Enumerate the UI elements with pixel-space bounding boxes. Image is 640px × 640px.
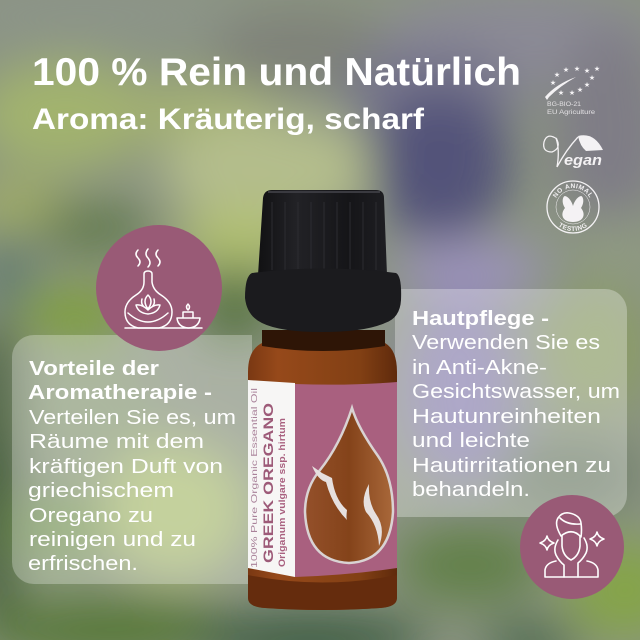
badge: EU organic leaf: ★	[594, 65, 600, 73]
badge: EU organic leaf: ★	[569, 89, 575, 97]
icon: aroma diffuser circle	[96, 225, 222, 351]
label text: Origanum vulgare ssp. hirtum	[277, 418, 288, 567]
text block: aromatherapy: Aromatherapie -	[28, 381, 212, 404]
badge: no animal testing: TESTING	[560, 222, 587, 231]
text block: aromatherapy: griechischem	[28, 479, 174, 502]
badge: EU organic leaf: ★	[577, 86, 583, 94]
text block: aromatherapy: kräftigen Duft von	[29, 455, 223, 478]
drop emblem	[305, 408, 393, 563]
text block: skin care: Verwenden Sie es	[412, 331, 600, 354]
text block: skin care: behandeln.	[412, 478, 530, 501]
badge: EU organic leaf: ★	[550, 79, 556, 87]
panel: skin care	[395, 289, 627, 517]
title: Aroma: Kräuterig, scharf	[32, 103, 424, 136]
badge: EU organic leaf: BG-BIO-21	[547, 101, 581, 108]
badge: EU organic leaf: ★	[574, 65, 580, 73]
badge: EU organic leaf: ★	[584, 81, 590, 89]
text block: skin care: und leichte	[412, 429, 530, 452]
title	[32, 51, 521, 136]
bottle body	[248, 335, 397, 610]
text block: skin care: Gesichtswasser, um	[412, 380, 620, 403]
text block: aromatherapy: Vorteile der	[29, 357, 159, 380]
text block: aromatherapy: Oregano zu	[29, 504, 153, 527]
text block: aromatherapy	[28, 357, 236, 575]
text block: aromatherapy: Verteilen Sie es, um	[29, 406, 236, 429]
badge: EU organic leaf: ★	[558, 89, 564, 97]
text block: skin care: Hautirritationen zu	[412, 454, 611, 477]
bottle cap	[258, 190, 387, 275]
text block: skin care	[412, 307, 620, 501]
badge: EU organic leaf	[545, 65, 600, 116]
badge: no animal testing	[546, 180, 600, 234]
badge: no animal testing: NO ANIMAL	[552, 184, 592, 198]
text block: aromatherapy: Räume mit dem	[29, 430, 204, 453]
bottle label: white strip	[248, 380, 295, 577]
bottle label: pink	[295, 382, 397, 577]
badge: EU organic leaf: ★	[554, 71, 560, 79]
label text: GREEK OREGANO	[260, 403, 276, 563]
badge: EU organic leaf: ★	[563, 66, 569, 74]
text block: skin care: Hautunreinheiten	[412, 405, 601, 428]
badge: EU organic leaf: ★	[589, 74, 595, 82]
badge: vegan	[544, 135, 603, 169]
panel: aromatherapy	[12, 335, 252, 584]
bottle collar	[245, 268, 401, 332]
badge: EU organic leaf: ★	[584, 67, 590, 75]
badge: vegan: egan	[564, 152, 602, 169]
bottle	[245, 190, 401, 610]
text block: aromatherapy: erfrischen.	[28, 552, 138, 575]
badge: EU organic leaf: EU Agriculture	[547, 109, 595, 116]
label text	[250, 388, 288, 568]
text block: skin care: in Anti-Akne-	[412, 356, 547, 379]
text block: aromatherapy: reinigen und zu	[29, 528, 196, 551]
text block: skin care: Hautpflege -	[412, 307, 549, 330]
icon: face care circle	[520, 495, 624, 599]
label text: 100% Pure Organic Essential Oil	[250, 388, 259, 568]
title: 100 % Rein und Natürlich	[32, 51, 521, 94]
